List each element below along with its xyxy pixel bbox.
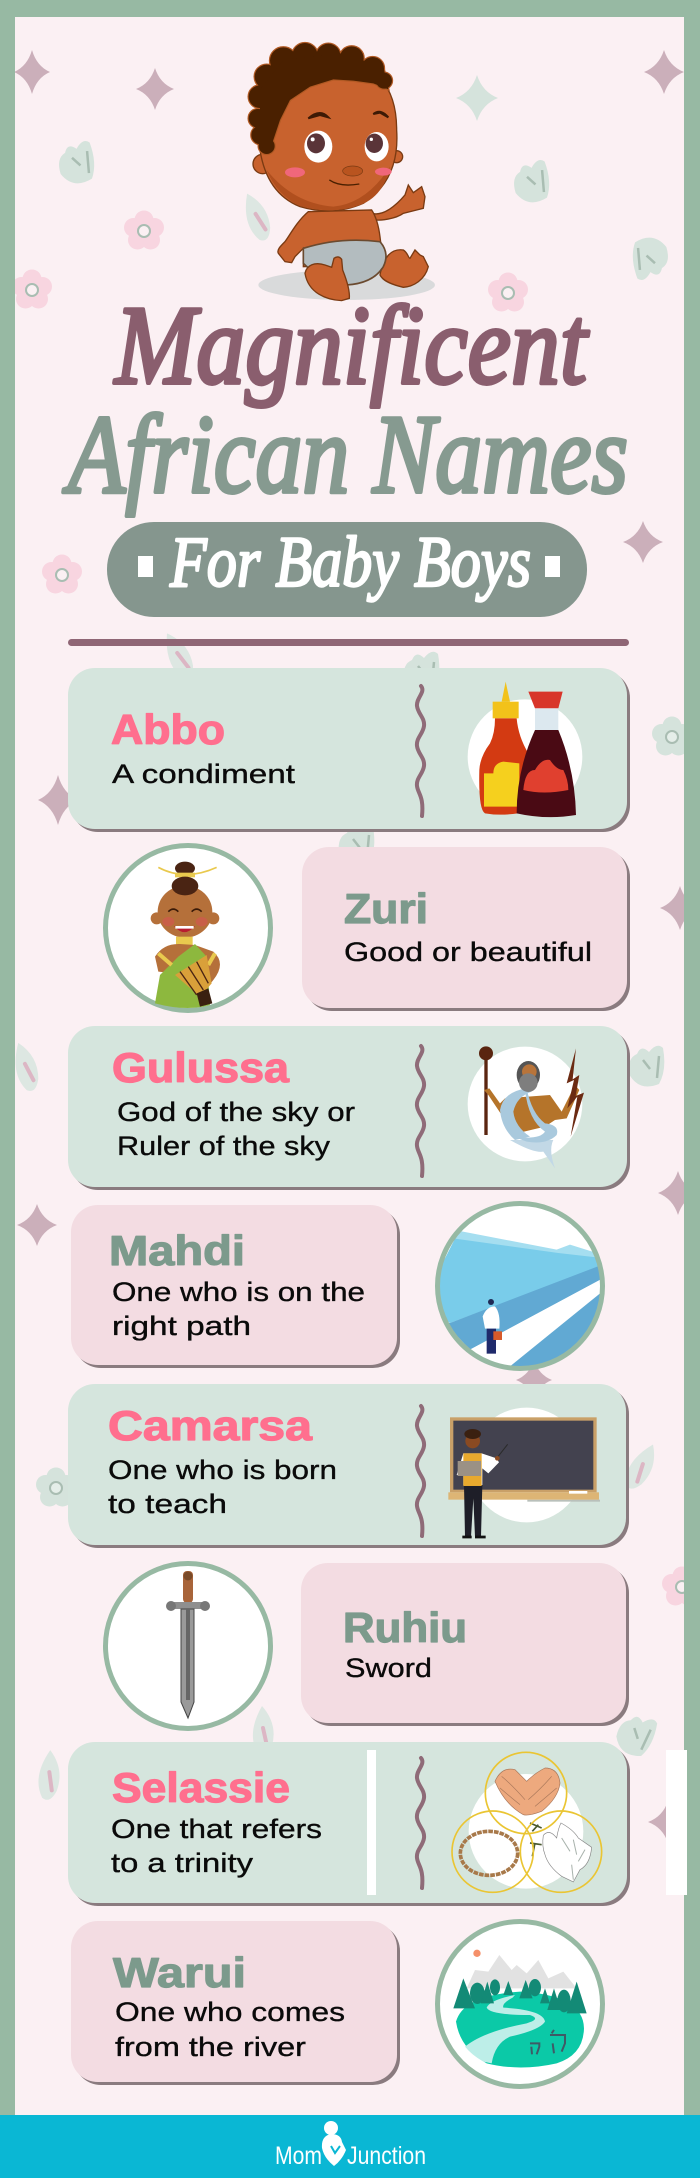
icon: condiment bottles — [468, 682, 582, 817]
footer band — [0, 2115, 700, 2178]
meaning: One who comes from the river: One who comes — [115, 1997, 345, 2027]
wavy divider — [417, 686, 424, 816]
meaning: One who is born to teach: to teach — [108, 1489, 227, 1519]
meaning: Good or beautiful: Good or beautiful — [344, 937, 592, 967]
name: Abbo: Abbo — [111, 706, 225, 753]
meaning: One who comes from the river: from the river — [115, 2032, 306, 2062]
name: Gulussa: Gulussa — [112, 1044, 290, 1091]
panel: Ruhiu — [301, 1563, 629, 1726]
subtitle pill: For Baby Boys: For Baby Boys — [169, 522, 531, 602]
logo: MomJunction: Junction — [347, 2142, 426, 2170]
icon: river landscape in circle — [438, 1922, 602, 2086]
meaning: One who is on the right path: right path — [112, 1311, 251, 1341]
panel: Abbo — [68, 668, 630, 832]
meaning: A condiment: A condiment — [112, 759, 296, 789]
icon: boy with drum in circle — [106, 846, 270, 1010]
name: Ruhiu: Ruhiu — [343, 1604, 467, 1651]
panel: Warui — [71, 1921, 400, 2085]
name: Camarsa: Camarsa — [108, 1402, 313, 1449]
wavy divider — [417, 1406, 424, 1536]
panel: Selassie — [68, 1742, 630, 1906]
panel: Gulussa — [68, 1026, 630, 1190]
meaning: One that refers to a trinity: One that refers — [111, 1814, 322, 1844]
name: Selassie: Selassie — [112, 1764, 290, 1811]
name: Mahdi: Mahdi — [109, 1227, 245, 1274]
meaning: One that refers to a trinity: to a trinity — [111, 1848, 254, 1878]
name: Zuri: Zuri — [344, 885, 428, 932]
name: Warui: Warui — [113, 1949, 246, 1996]
meaning: Sword: Sword — [345, 1653, 432, 1683]
icon: sky god with lightning — [468, 1046, 584, 1168]
meaning: God of the sky or Ruler of the sky: God of the sky or — [117, 1097, 355, 1127]
icon: sword in circle — [106, 1564, 270, 1728]
meaning: God of the sky or Ruler of the sky: Ruler of the sky — [117, 1131, 331, 1161]
icon: person on a path in circle — [433, 1204, 607, 1375]
meaning: One who is on the right path: One who is on the — [112, 1277, 365, 1307]
panel: Camarsa — [68, 1384, 629, 1548]
panel: Mahdi — [71, 1205, 400, 1368]
white bar at right margin — [666, 1750, 687, 1895]
logo: MomJunction: Mom — [275, 2142, 322, 2170]
icon: teacher at blackboard — [448, 1408, 600, 1538]
title: Magnificent: Magnificent — [113, 284, 590, 408]
white bar left of divider — [367, 1750, 376, 1895]
panel: Zuri — [302, 847, 630, 1011]
wavy divider — [417, 1046, 424, 1176]
icon: trinity circles — [452, 1752, 602, 1892]
meaning: One who is born to teach: One who is born — [108, 1455, 337, 1485]
logo: MomJunction — [275, 2121, 426, 2170]
title divider — [68, 639, 629, 646]
icon: sitting baby — [249, 43, 435, 301]
wavy divider — [417, 1758, 424, 1888]
